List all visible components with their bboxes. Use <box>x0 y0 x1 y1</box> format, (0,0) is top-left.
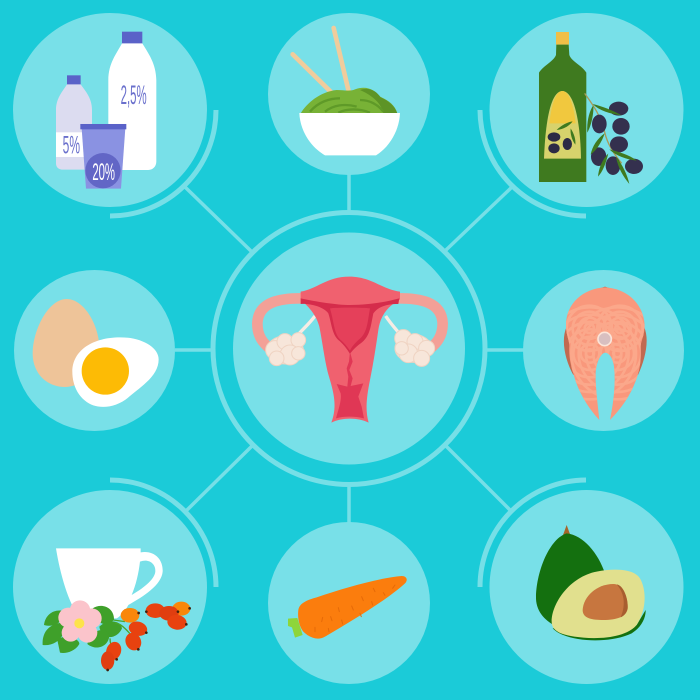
icon: olive oil bottle and olives <box>539 32 643 184</box>
panel: centre ring <box>213 212 485 484</box>
small milk bottle: 5% <box>63 131 80 159</box>
oil bottle <box>539 32 586 182</box>
white cup <box>56 548 163 618</box>
leaves <box>43 606 122 653</box>
yogurt cup: 20% <box>92 159 115 186</box>
panel: centre circle <box>233 232 465 464</box>
icon: noodle bowl <box>293 28 400 155</box>
icon: carrot <box>288 576 407 639</box>
icon: tea cup with rosehip <box>43 548 191 671</box>
large milk bottle: 2,5% <box>121 80 147 110</box>
icon: uterus <box>257 277 443 423</box>
icon: egg <box>33 299 159 407</box>
icon: dairy bottles <box>56 32 156 189</box>
flower <box>58 600 102 643</box>
connector lines <box>175 174 524 524</box>
rosehip stems <box>110 620 133 650</box>
rosehips <box>101 602 191 671</box>
outer arcs <box>110 110 586 587</box>
yogurt cup <box>80 124 126 189</box>
icon: avocado <box>536 525 646 640</box>
icon: salmon steak <box>564 286 647 420</box>
large milk bottle <box>108 32 156 170</box>
olive branch <box>585 93 643 184</box>
small milk bottle <box>56 75 92 170</box>
